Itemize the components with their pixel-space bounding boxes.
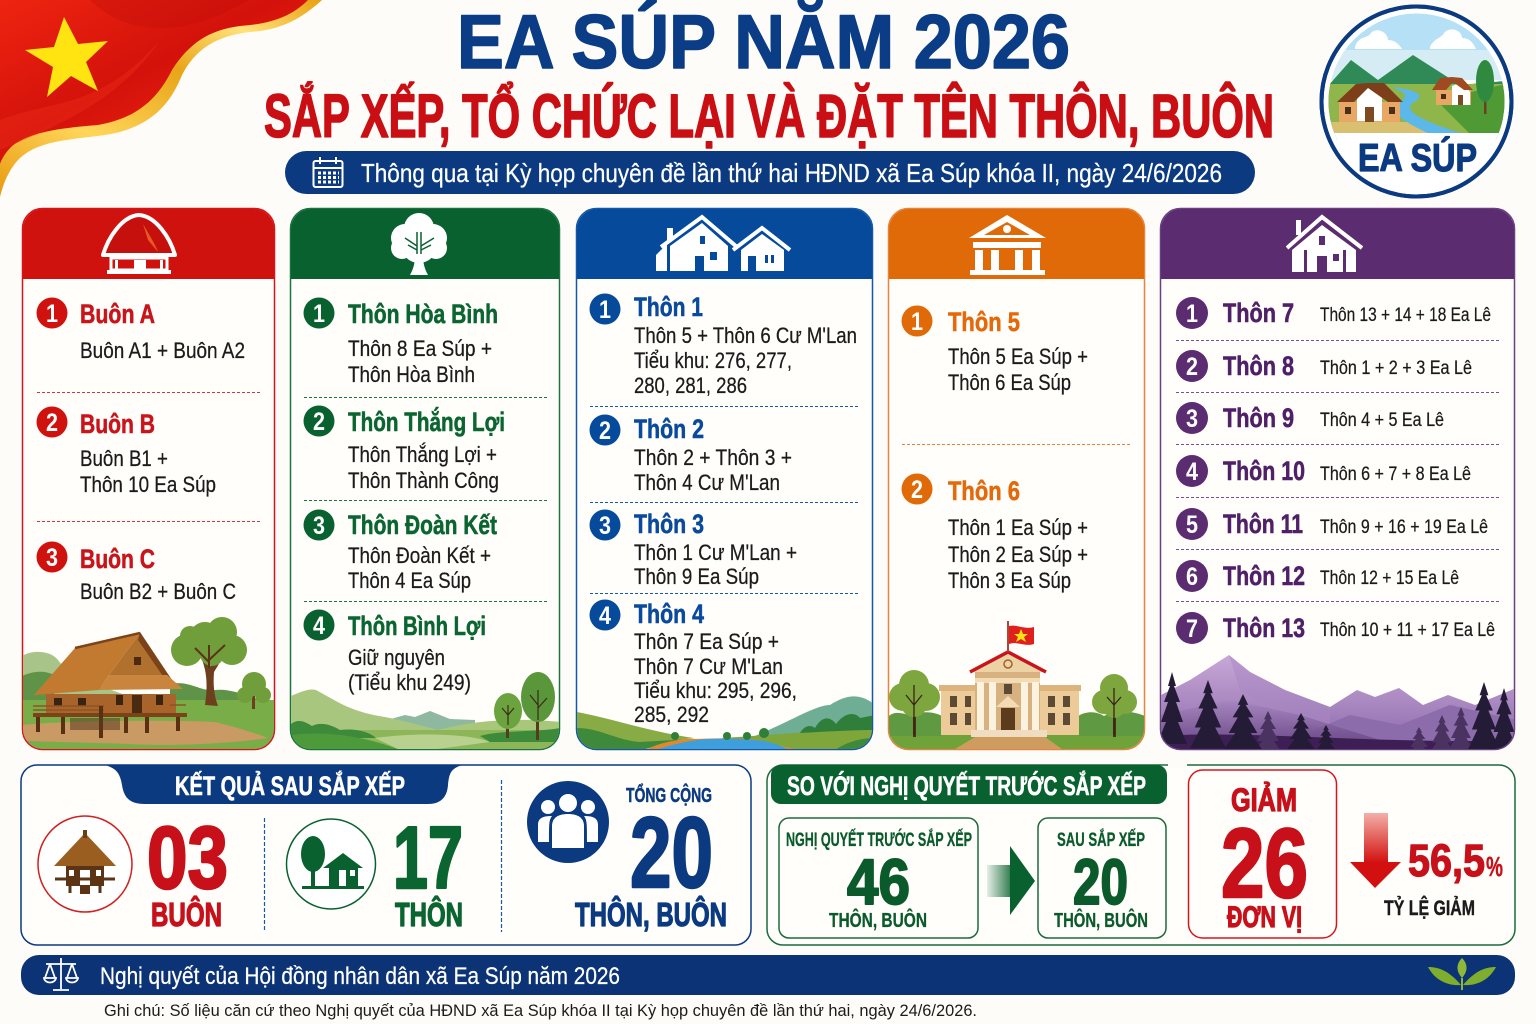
item: Thôn 8: Thôn 1 + 2 + 3 Ea Lê bbox=[1320, 358, 1472, 379]
item: Thôn Bình Lợi: 4 bbox=[313, 612, 325, 640]
illustration: river and hills bbox=[577, 696, 875, 752]
item: Buôn A: Buôn A1 + Buôn A2 bbox=[80, 338, 245, 363]
item: Thôn 5: 1 bbox=[911, 308, 923, 336]
item: Thôn 9 bbox=[1176, 402, 1444, 434]
box: after: 20 bbox=[1073, 846, 1128, 918]
item: Thôn 6: Thôn 6 bbox=[948, 476, 1020, 506]
item: Thôn Bình Lợi: Giữ nguyên bbox=[348, 645, 445, 670]
item: Thôn 6: Thôn 3 Ea Súp bbox=[948, 568, 1071, 593]
item: Buôn A: 1 bbox=[46, 300, 58, 328]
box: before bbox=[779, 818, 978, 938]
reduction rate bbox=[1384, 835, 1503, 920]
label total: TỔNG CỘNG bbox=[626, 783, 712, 807]
item: Buôn C bbox=[36, 542, 236, 604]
panel header: purple bbox=[1160, 208, 1516, 279]
section heading tab: SO VỚI NGHỊ QUYẾT TRƯỚC SẮP XẾP bbox=[787, 770, 1146, 801]
item: Thôn Thắng Lợi: Thôn Thành Công bbox=[348, 468, 499, 493]
item: Thôn 10: Thôn 10 bbox=[1223, 456, 1305, 486]
item: Thôn 9: 3 bbox=[1186, 405, 1198, 433]
box: after bbox=[1038, 818, 1166, 938]
arrow: down bbox=[1350, 813, 1401, 888]
item: Thôn 12: 6 bbox=[1186, 563, 1198, 591]
item: Buôn B: Buôn B bbox=[80, 409, 155, 439]
item: Buôn B: Buôn B1 + bbox=[80, 446, 168, 471]
box: before: 46 bbox=[847, 846, 910, 918]
item: Thôn 5: Thôn 5 Ea Súp + bbox=[948, 344, 1088, 369]
item: Buôn A: Buôn A bbox=[80, 299, 155, 329]
item: Thôn Đoàn Kết bbox=[304, 510, 497, 593]
item: Thôn Thắng Lợi: Thôn Thắng Lợi bbox=[348, 406, 505, 437]
panel: results after rearrangement bbox=[21, 765, 751, 945]
item: Thôn 6: Thôn 1 Ea Súp + bbox=[948, 515, 1088, 540]
box: reduction: 26 bbox=[1221, 808, 1308, 918]
item: Thôn 1: Tiểu khu: 276, 277, bbox=[634, 348, 792, 373]
item: Thôn 2: 2 bbox=[599, 417, 611, 445]
item: Thôn 2: Thôn 2 + Thôn 3 + bbox=[634, 445, 792, 470]
item: Thôn 6: 2 bbox=[911, 476, 923, 504]
item: Thôn 8: 2 bbox=[1186, 353, 1198, 381]
flag ribbon bbox=[0, 0, 322, 197]
item: Thôn 3: Thôn 3 bbox=[634, 509, 704, 539]
item: Thôn 9: Thôn 4 + 5 Ea Lê bbox=[1320, 410, 1444, 431]
item: Thôn 13 bbox=[1176, 612, 1495, 644]
item: Thôn Hòa Bình: 1 bbox=[313, 300, 325, 328]
icon: columned hall bbox=[969, 215, 1046, 275]
item: Thôn 13: Thôn 13 bbox=[1223, 613, 1305, 643]
item: Buôn C: 3 bbox=[46, 544, 58, 572]
item: Thôn 8 bbox=[1176, 350, 1472, 382]
item: Thôn 11: 5 bbox=[1186, 511, 1198, 539]
box: reduction: ĐƠN VỊ bbox=[1227, 901, 1302, 934]
date banner bbox=[285, 151, 1255, 194]
item: Buôn B: Thôn 10 Ea Súp bbox=[80, 472, 216, 497]
item: Thôn 7 bbox=[1176, 297, 1491, 329]
item: Thôn 3 bbox=[590, 509, 797, 589]
box: before: NGHỊ QUYẾT TRƯỚC SẮP XẾP bbox=[786, 829, 972, 851]
item: Thôn 4: Tiểu khu: 295, 296, bbox=[634, 678, 797, 703]
item: Thôn 2: Thôn 4 Cư M'Lan bbox=[634, 470, 780, 495]
reduction rate: TỶ LỆ GIẢM bbox=[1384, 896, 1475, 920]
item: Thôn 6: Thôn 2 Ea Súp + bbox=[948, 542, 1088, 567]
title: EA SÚP NĂM 2026 bbox=[457, 0, 1070, 85]
item: Thôn 12: Thôn 12 + 15 Ea Lê bbox=[1320, 568, 1459, 589]
footer text: Nghị quyết của Hội đồng nhân dân xã Ea Súp năm 2026 bbox=[100, 963, 620, 990]
item: Thôn 11: Thôn 9 + 16 + 19 Ea Lê bbox=[1320, 517, 1488, 538]
label thôn: THÔN bbox=[395, 895, 463, 933]
item: Thôn Đoàn Kết: Thôn Đoàn Kết bbox=[348, 510, 497, 540]
panel header: orange bbox=[888, 208, 1146, 279]
item: Thôn 10 bbox=[1176, 455, 1471, 487]
icon: house bbox=[1287, 217, 1362, 272]
item: Thôn 6 bbox=[902, 474, 1088, 593]
item: Thôn 11 bbox=[1176, 508, 1488, 540]
item: Thôn Hòa Bình: Thôn 8 Ea Súp + bbox=[348, 336, 492, 361]
item: Thôn 4 bbox=[590, 599, 797, 727]
icon: leaves bbox=[1428, 958, 1496, 990]
icon: house and tree in green circle bbox=[286, 819, 376, 909]
item: Thôn 2: Thôn 2 bbox=[634, 414, 704, 444]
item: Thôn 7: Thôn 13 + 14 + 18 Ea Lê bbox=[1320, 305, 1491, 326]
tree bbox=[202, 660, 220, 706]
item: Thôn Thắng Lợi bbox=[304, 406, 505, 493]
item: Thôn Bình Lợi: Thôn Bình Lợi bbox=[348, 611, 486, 641]
label thôn, buôn: THÔN, BUÔN bbox=[575, 895, 727, 933]
item: Thôn 1: Thôn 5 + Thôn 6 Cư M'Lan bbox=[634, 323, 857, 348]
banner text: Thông qua tại Kỳ họp chuyên đề lần thứ hai HĐND xã Ea Súp khóa II, ngày 24/6/2026 bbox=[361, 158, 1222, 188]
panel: Thôn 5-6 (orange) bbox=[888, 208, 1146, 752]
item: Thôn 10: 4 bbox=[1186, 458, 1198, 486]
item: Thôn Thắng Lợi: 2 bbox=[313, 408, 325, 436]
icon: two houses bbox=[656, 217, 790, 271]
item: Thôn Đoàn Kết: Thôn 4 Ea Súp bbox=[348, 568, 471, 593]
panel header: red bbox=[22, 208, 276, 279]
panel: Thôn 7-13 (purple) bbox=[1157, 208, 1518, 756]
icon: stilt hut bbox=[103, 215, 175, 274]
item: Thôn 1: Thôn 1 bbox=[634, 292, 703, 322]
section heading tab: KẾT QUẢ SAU SẮP XẾP bbox=[175, 769, 405, 801]
item: Thôn 8: Thôn 8 bbox=[1223, 351, 1294, 381]
item: Buôn A bbox=[36, 298, 245, 363]
item: Thôn 4: 4 bbox=[599, 602, 611, 630]
stat: 17 thôn bbox=[286, 808, 463, 933]
item: Buôn C: Buôn B2 + Buôn C bbox=[80, 579, 236, 604]
item: Thôn Bình Lợi bbox=[304, 610, 486, 695]
item: Thôn 1: 1 bbox=[599, 296, 611, 324]
stat: total 20 bbox=[527, 781, 727, 933]
logo text: EA SÚP bbox=[1358, 136, 1477, 180]
item: Thôn 10: Thôn 6 + 7 + 8 Ea Lê bbox=[1320, 464, 1471, 485]
item: Thôn 5: Thôn 5 bbox=[948, 307, 1020, 337]
label buôn: BUÔN bbox=[151, 895, 222, 933]
item: Buôn B bbox=[36, 406, 216, 497]
panel: comparison before rearrangement bbox=[767, 760, 1515, 945]
item: Thôn 2 bbox=[590, 414, 792, 495]
icon: scales bbox=[44, 958, 78, 990]
reduction rate: 56,5 bbox=[1408, 835, 1485, 886]
item: Thôn Thắng Lợi: Thôn Thắng Lợi + bbox=[348, 442, 497, 467]
item: Thôn 5: Thôn 6 Ea Súp bbox=[948, 370, 1071, 395]
panel: Buôn (red) bbox=[22, 208, 276, 752]
logo: Ea Súp bbox=[1320, 0, 1515, 203]
item: Thôn 4: Thôn 7 Ea Súp + bbox=[634, 629, 779, 654]
footer bar bbox=[21, 955, 1515, 995]
panel: Thôn (green) bbox=[290, 208, 561, 752]
item: Thôn 4: Thôn 4 bbox=[634, 599, 704, 629]
item: Thôn 4: Thôn 7 Cư M'Lan bbox=[634, 654, 783, 679]
item: Thôn 11: Thôn 11 bbox=[1223, 509, 1303, 539]
illustration: government building bbox=[889, 621, 1145, 752]
note: Ghi chú: Số liệu căn cứ theo Nghị quyết của HĐND xã Ea Súp khóa II tại Kỳ họp chuyên đề lần thứ hai, ngày 24/6/2026. bbox=[104, 1001, 977, 1020]
number 20: 20 bbox=[630, 797, 713, 909]
stat: 03 buôn bbox=[38, 808, 228, 933]
box: after: SAU SẮP XẾP bbox=[1057, 829, 1145, 851]
icon: tree bbox=[391, 213, 447, 275]
number 17: 17 bbox=[393, 808, 463, 907]
box: after: THÔN, BUÔN bbox=[1054, 908, 1148, 932]
icon: people bbox=[527, 781, 609, 863]
item: Thôn Hòa Bình bbox=[304, 298, 498, 387]
item: Thôn 5 bbox=[902, 306, 1088, 395]
item: Thôn 13: Thôn 10 + 11 + 17 Ea Lê bbox=[1320, 620, 1495, 641]
item: Thôn Đoàn Kết: Thôn Đoàn Kết + bbox=[348, 543, 491, 568]
item: Thôn 3: Thôn 1 Cư M'Lan + bbox=[634, 540, 797, 565]
item: Thôn 1 bbox=[590, 292, 857, 398]
item: Thôn Hòa Bình: Thôn Hòa Bình bbox=[348, 299, 498, 329]
item: Thôn 3: 3 bbox=[599, 512, 611, 540]
item: Thôn 3: Thôn 9 Ea Súp bbox=[634, 564, 759, 589]
box: reduction bbox=[1188, 770, 1336, 938]
illustration: green hills and trees bbox=[291, 672, 561, 752]
panel header: blue bbox=[576, 208, 874, 279]
item: Thôn 12 bbox=[1176, 560, 1459, 592]
icon: hut in red circle bbox=[38, 816, 132, 912]
item: Thôn 7: Thôn 7 bbox=[1223, 298, 1294, 328]
item: Thôn Bình Lợi: (Tiểu khu 249) bbox=[348, 670, 471, 695]
item: Buôn C: Buôn C bbox=[80, 544, 155, 574]
item: Buôn B: 2 bbox=[46, 409, 58, 437]
icon: calendar bbox=[314, 157, 342, 187]
item: Thôn 7: 1 bbox=[1186, 300, 1198, 328]
item: Thôn 9: Thôn 9 bbox=[1223, 403, 1294, 433]
section heading tab bbox=[105, 765, 463, 804]
panel: Thôn 1-4 (blue) bbox=[576, 208, 875, 752]
item: Thôn 13: 7 bbox=[1186, 615, 1198, 643]
box: before: THÔN, BUÔN bbox=[829, 908, 927, 932]
icon: flag star bbox=[25, 17, 108, 97]
number 03: 03 bbox=[147, 808, 228, 907]
panel header: green bbox=[290, 208, 561, 279]
item: Thôn Hòa Bình: Thôn Hòa Bình bbox=[348, 362, 475, 387]
arrow: right bbox=[987, 846, 1035, 915]
item: Thôn 1: 280, 281, 286 bbox=[634, 373, 747, 398]
box: reduction: GIẢM bbox=[1231, 782, 1297, 818]
item: Thôn Đoàn Kết: 3 bbox=[313, 512, 325, 540]
section heading tab bbox=[771, 765, 1167, 804]
item: Thôn 12: Thôn 12 bbox=[1223, 561, 1305, 591]
illustration: purple mountains and firs bbox=[1157, 655, 1518, 756]
icon: red flag bbox=[1007, 621, 1034, 652]
item: Thôn 4: 285, 292 bbox=[634, 702, 709, 727]
house bbox=[46, 694, 176, 714]
reduction rate: % bbox=[1486, 851, 1503, 882]
illustration: stilt house and tree bbox=[22, 617, 276, 752]
